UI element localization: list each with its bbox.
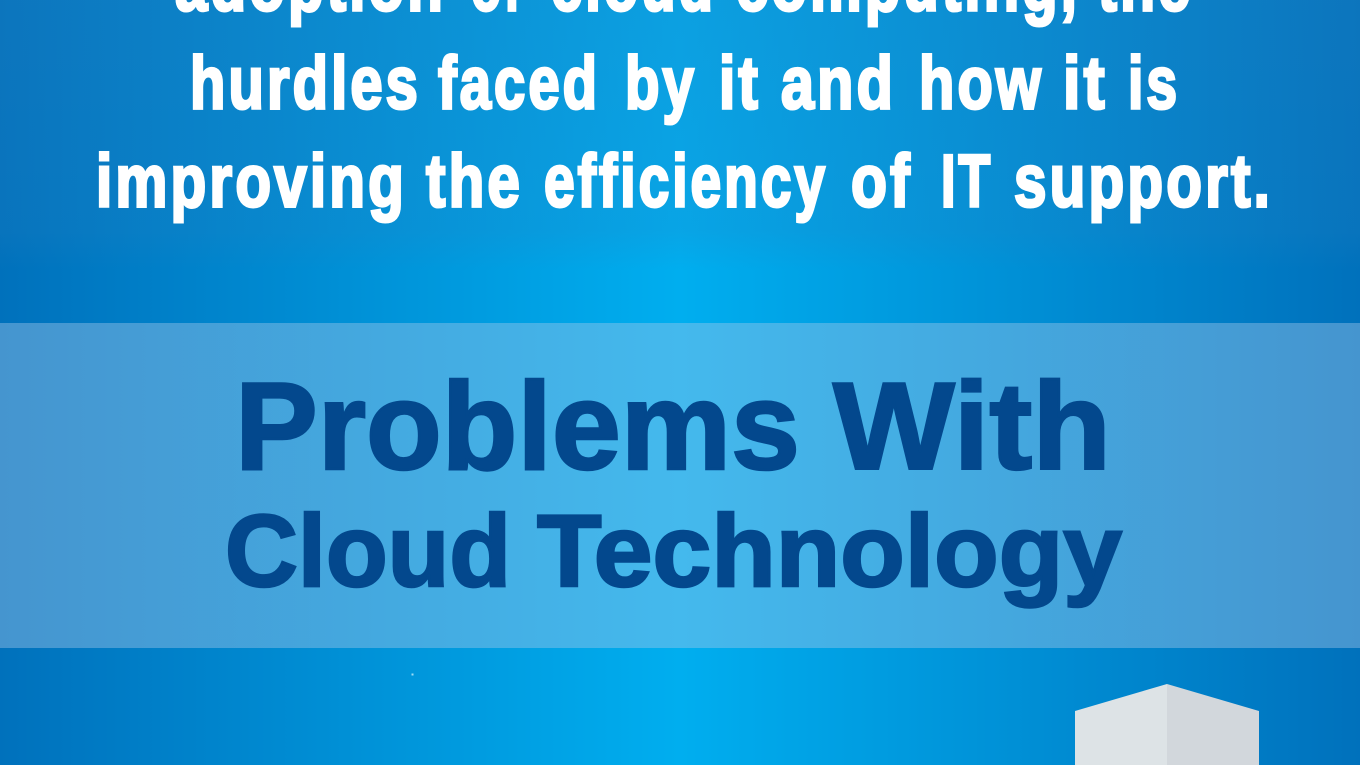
intro text: efficiency [544, 140, 828, 222]
intro text: hurdles [190, 42, 421, 124]
intro text: faced [438, 42, 600, 124]
intro text: it [1063, 42, 1108, 124]
heading: Technology [537, 494, 1122, 608]
intro text: how [919, 42, 1044, 124]
intro text: by [625, 42, 697, 124]
intro text: and [781, 42, 896, 124]
intro text: it [719, 42, 761, 124]
intro text: improving [96, 140, 407, 222]
speck [412, 674, 414, 676]
intro text: of [851, 140, 913, 222]
intro text: support. [1014, 140, 1273, 222]
intro text: is [1128, 42, 1180, 124]
intro text: IT [941, 140, 993, 222]
icon: cube [1075, 684, 1259, 765]
intro text [96, 0, 1273, 222]
heading [225, 358, 1122, 608]
heading: Problems [235, 358, 800, 496]
intro text: the [426, 140, 523, 222]
heading: Cloud [225, 494, 511, 608]
heading: With [833, 358, 1111, 496]
textured top haze [0, 0, 1360, 270]
panel: heading band [0, 323, 1360, 648]
